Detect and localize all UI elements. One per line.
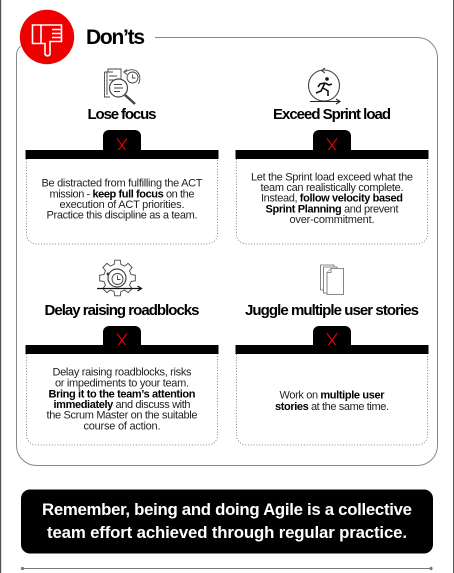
panel: exceed sprint load <box>236 68 428 244</box>
tab with red X <box>103 130 141 152</box>
icon: gear with clock <box>97 260 142 296</box>
callout banner: team effort achieved through regular practice. <box>47 523 407 542</box>
body text: Be distracted from fulfilling the ACT <box>42 178 203 190</box>
dotted text box <box>26 159 218 244</box>
body text <box>46 366 198 432</box>
body text <box>42 178 203 222</box>
body text: Work on multiple user <box>280 390 385 402</box>
body text: course of action. <box>84 420 160 432</box>
body text: over-commitment. <box>290 214 374 226</box>
body text: execution of ACT priorities. <box>60 199 184 211</box>
body text: team can realistically complete. <box>260 182 404 194</box>
body text: Instead, follow velocity based <box>261 192 403 204</box>
heading: Lose focus <box>88 106 156 123</box>
body text: stories at the same time. <box>275 401 389 413</box>
tab with red X <box>313 326 351 347</box>
body text: Practice this discipline as a team. <box>46 210 198 222</box>
dotted text box <box>236 159 428 244</box>
black bar <box>236 345 428 354</box>
body text: or impediments to your team. <box>55 378 189 390</box>
body text: Bring it to the team’s attention <box>48 388 196 400</box>
panel: juggle multiple user stories <box>236 265 428 445</box>
icon: red thumbs down <box>20 10 74 64</box>
black bar <box>236 150 428 159</box>
icon: document, magnifier and clock <box>104 69 140 104</box>
tab with red X <box>313 130 351 152</box>
body text: Delay raising roadblocks, risks <box>52 366 192 378</box>
callout banner <box>21 490 433 554</box>
icon: runner in loop <box>308 68 340 104</box>
callout banner: Remember, being and doing Agile is a collective <box>42 500 412 519</box>
dotted text box <box>26 354 218 445</box>
body text: the Scrum Master on the suitable <box>46 410 198 422</box>
body text <box>251 172 413 226</box>
tab with red X <box>103 326 141 347</box>
panel: delay raising roadblocks <box>26 260 218 445</box>
panel: lose focus <box>26 69 218 244</box>
main panel outline <box>16 38 438 466</box>
body text: Let the Sprint load exceed what the <box>251 172 413 184</box>
black bar <box>26 345 218 354</box>
body text <box>275 390 389 413</box>
black bar <box>26 150 218 159</box>
icon: stacked documents <box>320 265 344 294</box>
title: Don’ts <box>86 26 145 49</box>
body text: Sprint Planning and prevent <box>266 204 398 216</box>
dotted text box <box>236 354 428 445</box>
body text: mission - keep full focus on the <box>50 188 194 200</box>
footer rule <box>21 567 433 570</box>
heading: Juggle multiple user stories <box>245 302 419 319</box>
body text: immediately and discuss with <box>54 399 190 411</box>
heading: Exceed Sprint load <box>273 106 391 123</box>
heading: Delay raising roadblocks <box>44 302 200 319</box>
